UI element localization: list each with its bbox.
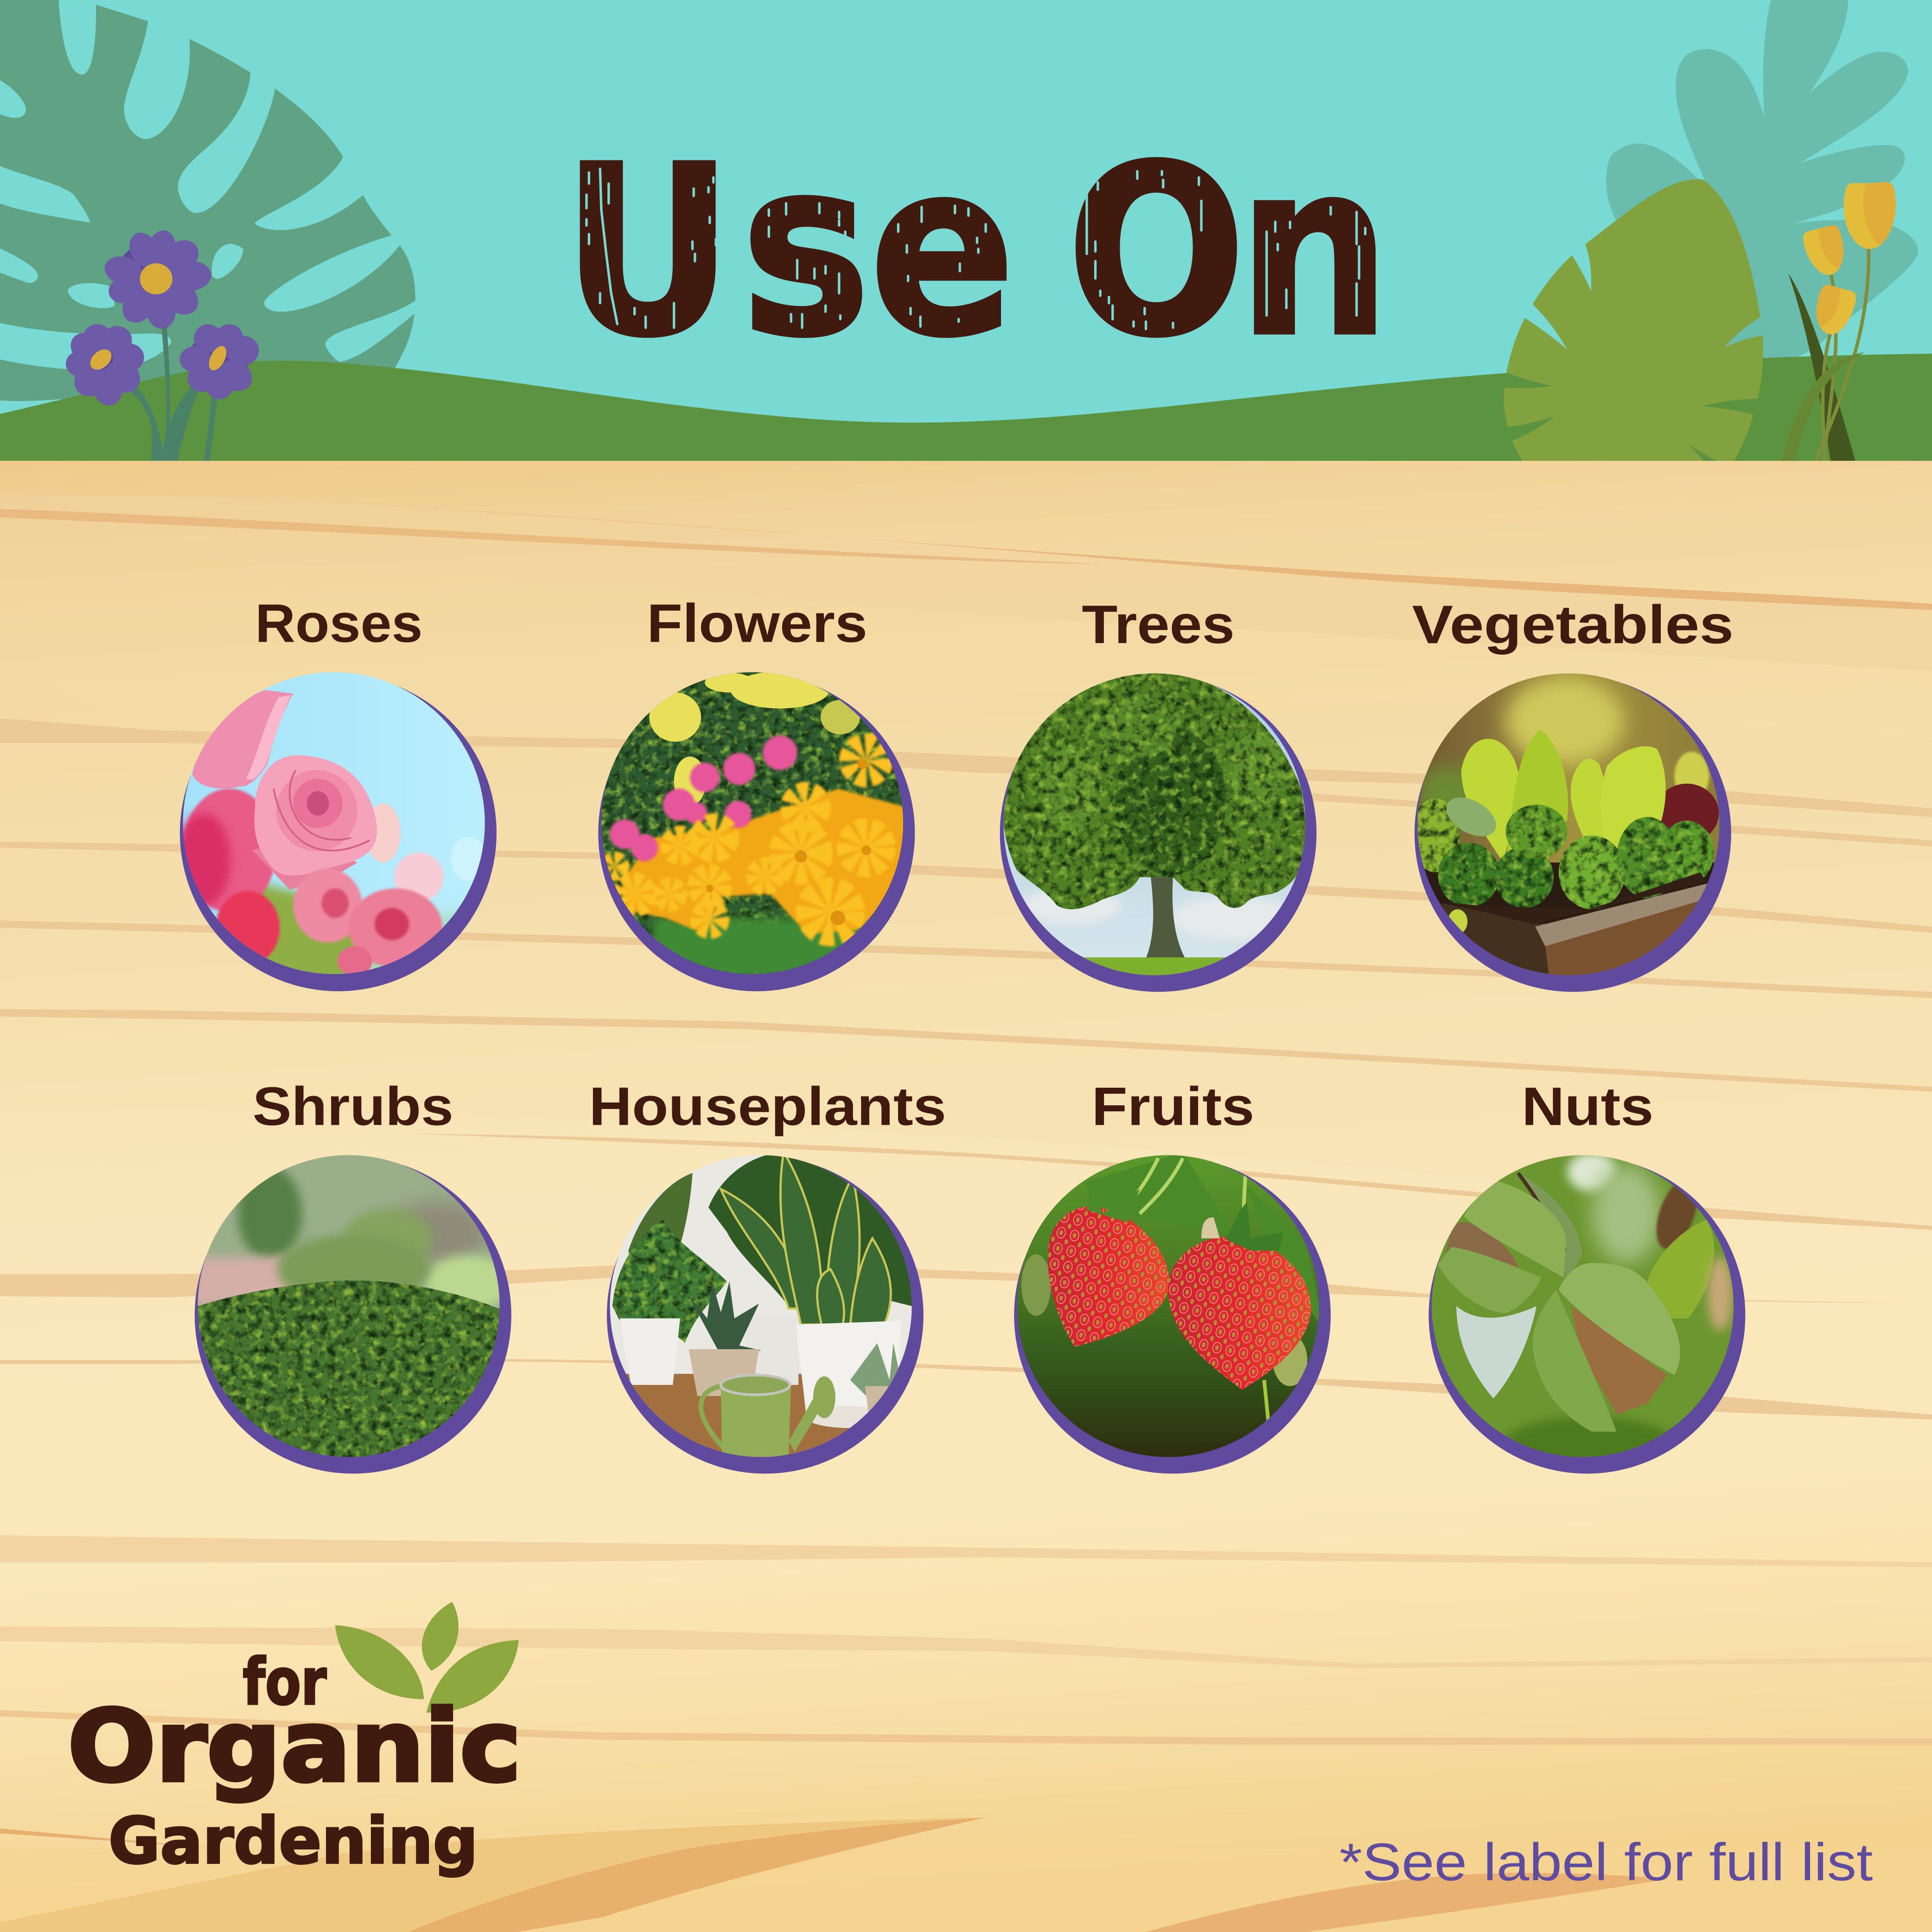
purple ring <box>195 1157 511 1473</box>
title: Use On <box>562 108 1391 390</box>
label: Vegetables: Vegetables <box>1412 594 1734 655</box>
wood grain streaks <box>0 493 1932 1932</box>
front leaf and tulips, right <box>1504 179 1896 461</box>
photo: pink roses <box>183 672 485 974</box>
watering can <box>701 1375 835 1458</box>
photo: flower bed <box>598 665 912 980</box>
photo: potted plants <box>604 1152 924 1473</box>
main rose <box>253 755 377 890</box>
purple ring <box>607 1157 924 1473</box>
logo: for Organic Gardening <box>68 1602 521 1878</box>
photo: green walnuts <box>1423 1152 1743 1473</box>
title: Use On: s <box>741 108 871 390</box>
purple ring <box>1014 1157 1331 1473</box>
title distress marks <box>587 169 1365 329</box>
logo text: Organic: Organic <box>68 1690 521 1804</box>
title: Use On: U <box>562 116 733 388</box>
item: Trees <box>998 594 1317 992</box>
green hill <box>0 354 1932 462</box>
purple ring <box>1428 1157 1745 1473</box>
wood table background <box>0 461 1932 1932</box>
footnote: *See label for full list <box>1339 1833 1873 1892</box>
label: Roses: Roses <box>255 593 423 654</box>
orange mass <box>622 789 905 934</box>
label: Houseplants: Houseplants <box>589 1076 946 1136</box>
photo: hedge <box>191 1152 511 1473</box>
left flower <box>64 321 147 408</box>
flower stems <box>125 323 218 461</box>
curved green blade <box>1781 352 1865 461</box>
large flower <box>101 228 213 331</box>
label: Nuts: Nuts <box>1522 1076 1653 1136</box>
purple ring <box>598 675 915 991</box>
logo leaves <box>335 1602 519 1713</box>
label: Fruits: Fruits <box>1092 1076 1254 1136</box>
photo: oak tree <box>998 665 1312 982</box>
upper nut <box>1438 1172 1582 1314</box>
sky background <box>0 0 1932 462</box>
logo text: for: for <box>243 1645 326 1719</box>
item: Houseplants <box>589 1076 946 1473</box>
purple ring <box>1000 675 1317 992</box>
purple flowers <box>64 228 263 461</box>
lower nut <box>1533 1263 1680 1432</box>
item: Nuts <box>1423 1076 1745 1473</box>
lower tulip <box>1816 285 1856 334</box>
dark blade <box>1788 273 1855 461</box>
right flower <box>179 320 263 400</box>
monstera leaf, top left <box>0 0 415 441</box>
item: Roses <box>176 593 497 991</box>
logo text: Gardening: Gardening <box>108 1804 478 1878</box>
back teal foliage, top right <box>1606 0 1918 373</box>
item: Fruits <box>1010 1076 1331 1473</box>
item: Vegetables <box>1411 594 1734 992</box>
item: Shrubs <box>191 1076 511 1473</box>
photo: lettuce planter <box>1411 665 1731 986</box>
photo: strawberries <box>1010 1152 1331 1473</box>
label: Trees: Trees <box>1082 594 1235 655</box>
purple ring <box>1415 675 1731 992</box>
title: Use On: O <box>1067 116 1246 388</box>
middle tulip <box>1803 225 1843 275</box>
label: Flowers: Flowers <box>647 593 867 654</box>
label: Shrubs: Shrubs <box>253 1076 453 1136</box>
item: Flowers <box>598 593 915 991</box>
title: Use On: e <box>869 111 1015 389</box>
purple ring <box>180 675 497 991</box>
tall tulip <box>1843 182 1896 249</box>
title: Use On: n <box>1237 111 1391 389</box>
olive leaf <box>1504 179 1763 461</box>
tulip stems <box>1816 249 1869 461</box>
